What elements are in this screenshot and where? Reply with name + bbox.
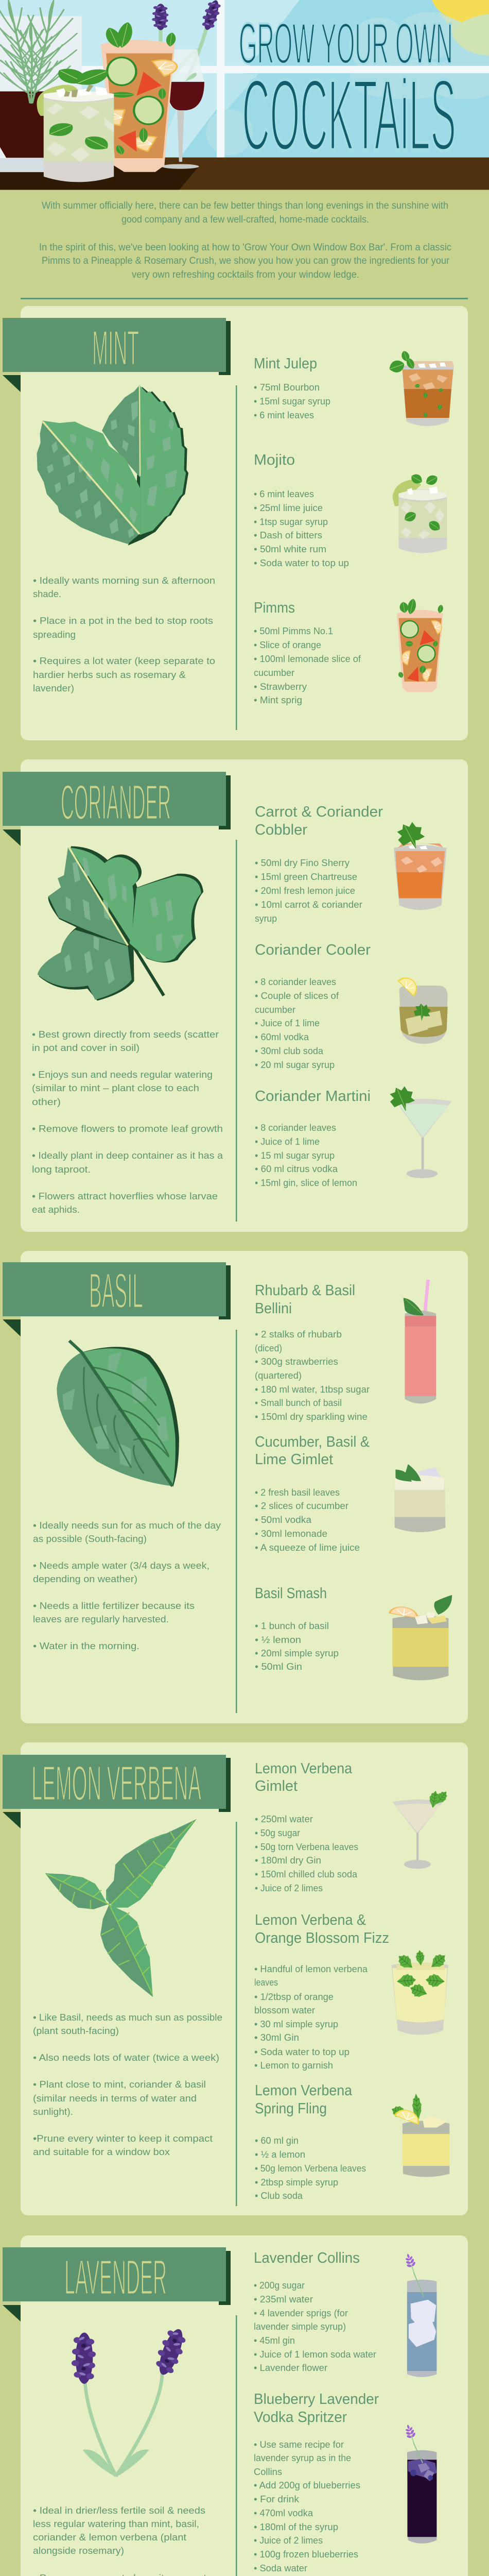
mojito glass bbox=[37, 65, 114, 182]
recipe: Mint Julep: • 6 mint leaves bbox=[254, 410, 314, 420]
recipe: Carrot & Coriander Cobbler: Carrot & Coriander bbox=[255, 804, 383, 820]
pimms glass bbox=[99, 22, 183, 172]
illustration: lavender sprigs bbox=[72, 2325, 190, 2477]
recipe: Lemon Verbena Gimlet: • 50g sugar bbox=[255, 1827, 300, 1838]
growing tips: coriander: eat aphids. bbox=[32, 1204, 80, 1215]
window ledge table bbox=[0, 158, 489, 190]
recipe: Lemon Verbena Spring Fling: Lemon Verbena bbox=[255, 2082, 352, 2099]
recipe: Lemon Verbena & Orange Blossom Fizz: • Soda water to top up bbox=[254, 2046, 350, 2057]
recipe: Lemon Verbena Spring Fling bbox=[255, 2082, 366, 2201]
recipe: Blueberry Lavender Vodka Spritzer bbox=[254, 2391, 379, 2576]
recipe: Basil Smash: Basil Smash bbox=[255, 1585, 327, 1602]
recipe: Pimms: Pimms bbox=[254, 600, 295, 616]
recipe: Lemon Verbena & Orange Blossom Fizz: • 1/2tbsp of orange bbox=[254, 1991, 334, 2002]
recipe: Coriander Martini: • 60 ml citrus vodka bbox=[255, 1163, 338, 1174]
growing tips: mint bbox=[33, 575, 215, 693]
recipe: Mojito bbox=[254, 452, 349, 568]
recipe: Coriander Martini: • 15ml gin, slice of lemon bbox=[255, 1177, 357, 1188]
recipe: Blueberry Lavender Vodka Spritzer: • 100g frozen blueberries bbox=[254, 2549, 358, 2560]
icon: coriander martini glass bbox=[388, 1085, 451, 1178]
recipe: Pimms: • Mint sprig bbox=[254, 694, 302, 705]
recipe: Lemon Verbena Gimlet: Gimlet bbox=[255, 1778, 298, 1794]
heading banner: basil: BASIL bbox=[89, 1263, 143, 1318]
illustration: mint leaves bbox=[37, 385, 188, 546]
header scene: window and cocktails bbox=[0, 0, 489, 190]
heading banner: mint bbox=[3, 318, 231, 392]
recipe: Lemon Verbena Spring Fling: • 60 ml gin bbox=[255, 2135, 299, 2146]
recipe: Cucumber, Basil & Lime Gimlet: Lime Gimlet bbox=[255, 1451, 333, 1468]
heading banner: coriander bbox=[3, 772, 231, 846]
panel: basil bbox=[3, 1251, 468, 1723]
panel: lemon verbena: LEMON VERBENA bbox=[31, 1756, 201, 1811]
recipe: Cucumber, Basil & Lime Gimlet: • 30ml lemonade bbox=[255, 1528, 327, 1539]
recipe: Basil Smash: • 20ml simple syrup bbox=[255, 1648, 339, 1658]
recipe: Lemon Verbena Gimlet bbox=[255, 1760, 358, 1893]
growing tips: lavender bbox=[33, 2505, 206, 2576]
recipe: Rhubarb & Basil Bellini: Bellini bbox=[255, 1300, 292, 1317]
recipe: Rhubarb & Basil Bellini bbox=[255, 1282, 370, 1422]
recipe: Mojito: • 6 mint leaves bbox=[254, 488, 314, 499]
recipe: Coriander Martini: • Juice of 1 lime bbox=[255, 1136, 320, 1147]
recipe: Blueberry Lavender Vodka Spritzer: • 470ml vodka bbox=[254, 2507, 313, 2518]
recipe: Blueberry Lavender Vodka Spritzer: Vodka Spritzer bbox=[254, 2409, 347, 2426]
recipe: Lemon Verbena Gimlet: • Juice of 2 limes bbox=[255, 1883, 323, 1893]
growing tips: coriander: • Ideally plant in deep container as it has a bbox=[32, 1150, 223, 1161]
recipe: Basil Smash: • 50ml Gin bbox=[255, 1661, 302, 1672]
recipe: Rhubarb & Basil Bellini: • 2 stalks of rhubarb bbox=[255, 1329, 342, 1340]
panel: lavender bbox=[3, 2235, 468, 2576]
growing tips: mint: • Ideally wants morning sun & afternoon bbox=[33, 575, 215, 586]
recipe: Cucumber, Basil & Lime Gimlet bbox=[255, 1434, 370, 1553]
recipe: Lemon Verbena & Orange Blossom Fizz: Lemon Verbena & bbox=[255, 1912, 366, 1928]
growing tips: mint: hardier herbs such as rosemary & bbox=[33, 669, 186, 680]
heading banner: basil bbox=[3, 1262, 231, 1336]
recipe: Carrot & Coriander Cobbler: syrup bbox=[255, 913, 277, 924]
icon: lavender collins glass bbox=[403, 2252, 436, 2377]
growing tips: coriander: in pot and cover in soil) bbox=[32, 1042, 139, 1053]
recipe: Carrot & Coriander Cobbler: • 50ml dry Fino Sherry bbox=[255, 857, 350, 868]
growing tips: lavender: • Ideal in drier/less fertile soil & needs bbox=[33, 2505, 205, 2516]
recipe: Lemon Verbena Gimlet: • 250ml water bbox=[255, 1814, 313, 1824]
icon: basil gimlet glass bbox=[395, 1464, 445, 1532]
recipe: Cucumber, Basil & Lime Gimlet: • 50ml vodka bbox=[255, 1514, 312, 1525]
growing tips: lemon verbena: sunlight). bbox=[33, 2106, 73, 2117]
icon: carrot cobbler glass bbox=[394, 820, 447, 910]
icon: spring fling glass bbox=[390, 2093, 449, 2177]
recipe: Carrot & Coriander Cobbler: • 10ml carrot & coriander bbox=[255, 899, 362, 910]
recipe: Pimms: • Slice of orange bbox=[254, 639, 321, 650]
glass of red drink with rosemary bbox=[0, 0, 86, 172]
recipe: Pimms: • Strawberry bbox=[254, 681, 307, 692]
recipe: Lemon Verbena & Orange Blossom Fizz: • Lemon to garnish bbox=[254, 2060, 333, 2071]
recipe: Lemon Verbena & Orange Blossom Fizz: • 30ml Gin bbox=[254, 2032, 299, 2043]
icon: pimms glass bbox=[397, 598, 445, 692]
heading banner: lavender bbox=[3, 2247, 231, 2321]
growing tips: lemon verbena: • Like Basil, needs as much sun as possible bbox=[33, 2012, 222, 2023]
recipe: Mojito: • 25ml lime juice bbox=[254, 502, 323, 513]
growing tips: lavender: less regular watering than mint, basil, bbox=[33, 2518, 199, 2529]
recipe: Rhubarb & Basil Bellini: Rhubarb & Basil bbox=[255, 1282, 355, 1299]
recipe: Lavender Collins: • 200g sugar bbox=[254, 2280, 305, 2291]
growing tips: lemon verbena: and suitable for a window box bbox=[33, 2146, 170, 2157]
introduction text: good company and a few well-crafted, home-made cocktails. bbox=[121, 214, 369, 225]
recipe: Blueberry Lavender Vodka Spritzer: • Use same recipe for bbox=[254, 2439, 344, 2450]
heading banner: lavender: LAVENDER bbox=[64, 2250, 167, 2305]
growing tips: mint: • Requires a lot water (keep separate to bbox=[33, 655, 215, 666]
introduction text: With summer officially here, there can be few better things than long evenings in the sunshine with bbox=[42, 200, 448, 211]
introduction text: In the spirit of this, we've been looking at how to 'Grow Your Own Window Box Bar'. From a classic bbox=[39, 242, 451, 253]
growing tips: basil: • Water in the morning. bbox=[33, 1640, 139, 1651]
recipe: Lemon Verbena Spring Fling: Spring Fling bbox=[255, 2100, 327, 2117]
recipe: Blueberry Lavender Vodka Spritzer: • 180ml of the syrup bbox=[254, 2521, 338, 2532]
growing tips: coriander: • Enjoys sun and needs regular watering bbox=[32, 1069, 213, 1080]
recipe: Carrot & Coriander Cobbler bbox=[255, 804, 383, 924]
recipe: Blueberry Lavender Vodka Spritzer: • Soda water bbox=[254, 2563, 307, 2573]
recipe: Pimms bbox=[254, 600, 361, 705]
growing tips: lemon verbena: • Plant close to mint, coriander & basil bbox=[33, 2079, 206, 2090]
growing tips: coriander: other) bbox=[32, 1096, 61, 1107]
icon: coriander cooler glass bbox=[397, 973, 448, 1044]
panel: coriander bbox=[3, 759, 468, 1232]
recipe: Rhubarb & Basil Bellini: (diced) bbox=[255, 1343, 282, 1353]
recipe: Lemon Verbena Gimlet: • 50g torn Verbena leaves bbox=[255, 1841, 358, 1852]
growing tips: basil bbox=[33, 1520, 221, 1651]
recipe: Lemon Verbena Gimlet: Lemon Verbena bbox=[255, 1760, 352, 1777]
recipe: Lemon Verbena & Orange Blossom Fizz: • 30 ml simple syrup bbox=[254, 2019, 338, 2029]
window sky with sun and clouds bbox=[0, 0, 489, 158]
recipe: Blueberry Lavender Vodka Spritzer: Blueberry Lavender bbox=[254, 2391, 379, 2408]
recipe: Mint Julep: • 15ml sugar syrup bbox=[254, 396, 330, 406]
recipe: Lemon Verbena Gimlet: • 150ml chilled club soda bbox=[255, 1869, 358, 1879]
recipe: Lavender Collins: • 235ml water bbox=[254, 2294, 313, 2304]
recipe: Blueberry Lavender Vodka Spritzer: lavender syrup as in the bbox=[254, 2452, 351, 2463]
illustration: basil leaf bbox=[57, 1341, 179, 1487]
recipe: Lavender Collins: lavender simple syrup) bbox=[254, 2321, 346, 2332]
recipe: Lemon Verbena Spring Fling: • 50g lemon Verbena leaves bbox=[255, 2163, 366, 2174]
recipe: Coriander Cooler: • 30ml club soda bbox=[255, 1045, 324, 1056]
recipe: Lavender Collins: • Lavender flower bbox=[254, 2362, 327, 2373]
heading banner: coriander: CORIANDER bbox=[61, 775, 171, 830]
growing tips: basil: • Needs a little fertilizer because its bbox=[33, 1600, 195, 1611]
recipe: Pimms: • 50ml Pimms No.1 bbox=[254, 625, 333, 636]
recipe: Rhubarb & Basil Bellini: • Small bunch of basil bbox=[255, 1397, 342, 1408]
recipe: Coriander Cooler: • Couple of slices of bbox=[255, 990, 339, 1001]
recipe: Rhubarb & Basil Bellini: (quartered) bbox=[255, 1370, 302, 1381]
recipe: Lavender Collins: • 4 lavender sprigs (for bbox=[254, 2308, 348, 2318]
recipe: Lemon Verbena & Orange Blossom Fizz: leaves bbox=[254, 1977, 278, 1988]
recipe: Coriander Martini: • 15 ml sugar syrup bbox=[255, 1150, 335, 1161]
growing tips: basil: • Needs ample water (3/4 days a week, bbox=[33, 1560, 209, 1571]
heading banner: lemon verbena bbox=[3, 1755, 231, 1828]
icon: mojito glass bbox=[392, 472, 447, 553]
introduction text: Pimms to a Pineapple & Rosemary Crush, we show you how you can grow the ingredients for your bbox=[42, 256, 450, 266]
growing tips: mint: spreading bbox=[33, 629, 76, 640]
recipe: Lemon Verbena & Orange Blossom Fizz bbox=[254, 1912, 389, 2071]
recipe: Lavender Collins bbox=[254, 2250, 376, 2373]
recipe: Mint Julep: Mint Julep bbox=[254, 355, 317, 372]
recipe: Lemon Verbena Spring Fling: • 2tbsp simple syrup bbox=[255, 2177, 338, 2188]
growing tips: coriander bbox=[32, 1029, 223, 1215]
introduction text: very own refreshing cocktails from your window ledge. bbox=[132, 269, 359, 280]
recipe: Carrot & Coriander Cobbler: Cobbler bbox=[255, 822, 308, 838]
recipe: Rhubarb & Basil Bellini: • 300g strawberries bbox=[255, 1356, 338, 1367]
panel: mint bbox=[3, 306, 468, 740]
recipe: Coriander Martini bbox=[255, 1088, 371, 1188]
icon: bellini glass bbox=[404, 1280, 436, 1403]
recipe: Blueberry Lavender Vodka Spritzer: • For drink bbox=[254, 2494, 300, 2504]
recipe: Coriander Cooler bbox=[255, 942, 371, 1070]
growing tips: coriander: • Flowers attract hoverflies whose larvae bbox=[32, 1191, 218, 1201]
growing tips: coriander: (similar to mint – plant close to each bbox=[32, 1082, 199, 1093]
illustration: coriander leaf bbox=[38, 846, 203, 1001]
recipe: Mojito: Mojito bbox=[254, 452, 295, 468]
recipe: Lemon Verbena & Orange Blossom Fizz: • Handful of lemon verbena bbox=[254, 1963, 368, 1974]
growing tips: mint: shade. bbox=[33, 588, 61, 599]
recipe: Rhubarb & Basil Bellini: • 150ml dry sparkling wine bbox=[255, 1411, 368, 1422]
recipe: Lavender Collins: • Juice of 1 lemon soda water bbox=[254, 2349, 376, 2360]
recipe: Coriander Cooler: • 60ml vodka bbox=[255, 1031, 309, 1042]
growing tips: basil: • Ideally needs sun for as much of the day bbox=[33, 1520, 221, 1531]
title bbox=[239, 12, 456, 172]
title: COCKTAiLS bbox=[242, 58, 456, 172]
icon: orange blossom fizz glass bbox=[392, 1950, 449, 2035]
recipe: Basil Smash: • 1 bunch of basil bbox=[255, 1620, 329, 1631]
growing tips: mint: • Place in a pot in the bed to stop roots bbox=[33, 615, 213, 626]
recipe: Basil Smash bbox=[255, 1585, 339, 1672]
recipe: Mojito: • 1tsp sugar syrup bbox=[254, 516, 328, 527]
heading banner: mint: MINT bbox=[92, 320, 139, 376]
recipe: Lemon Verbena & Orange Blossom Fizz: Orange Blossom Fizz bbox=[255, 1930, 389, 1946]
recipe: Lavender Collins: Lavender Collins bbox=[254, 2250, 360, 2266]
growing tips: basil: as possible (South-facing) bbox=[33, 1533, 147, 1544]
icon: basil smash glass bbox=[389, 1595, 452, 1680]
recipe: Cucumber, Basil & Lime Gimlet: • A squeeze of lime juice bbox=[255, 1542, 360, 1553]
growing tips: coriander: • Best grown directly from seeds (scatter bbox=[32, 1029, 219, 1040]
recipe: Pimms: cucumber bbox=[254, 667, 294, 678]
growing tips: lavender: alongside rosemary) bbox=[33, 2545, 124, 2556]
recipe: Blueberry Lavender Vodka Spritzer: Collins bbox=[254, 2466, 282, 2477]
growing tips: lemon verbena: • Also needs lots of water (twice a week) bbox=[33, 2052, 219, 2063]
recipe: Cucumber, Basil & Lime Gimlet: • 2 slices of cucumber bbox=[255, 1500, 348, 1511]
recipe: Cucumber, Basil & Lime Gimlet: • 2 fresh basil leaves bbox=[255, 1487, 340, 1498]
illustration: lemon verbena leaves bbox=[45, 1819, 197, 1997]
panel: lemon verbena bbox=[3, 1742, 468, 2215]
recipe: Lavender Collins: • 45ml gin bbox=[254, 2335, 295, 2346]
wine glass with lavender bbox=[152, 0, 223, 169]
recipe: Rhubarb & Basil Bellini: • 180 ml water, 1tbsp sugar bbox=[255, 1384, 370, 1395]
growing tips: lemon verbena: •Prune every winter to keep it compact bbox=[33, 2133, 213, 2144]
recipe: Mojito: • Soda water to top up bbox=[254, 557, 349, 568]
growing tips: lavender: coriander & lemon verbena (plant bbox=[33, 2532, 186, 2543]
recipe: Cucumber, Basil & Lime Gimlet: Cucumber, Basil & bbox=[255, 1434, 370, 1450]
recipe: Coriander Cooler: • Juice of 1 lime bbox=[255, 1018, 320, 1028]
icon: blueberry spritzer glass bbox=[403, 2423, 436, 2544]
recipe: Carrot & Coriander Cobbler: • 15ml green Chartreuse bbox=[255, 871, 357, 882]
recipe: Basil Smash: • ½ lemon bbox=[255, 1634, 301, 1645]
growing tips: lemon verbena: (similar needs in terms of water and bbox=[33, 2093, 197, 2104]
recipe: Blueberry Lavender Vodka Spritzer: • Add 200g of blueberries bbox=[254, 2480, 360, 2490]
title: GROW YOUR OWN bbox=[239, 12, 453, 76]
recipe: Coriander Martini: • 8 coriander leaves bbox=[255, 1122, 336, 1133]
growing tips: basil: leaves are regularly harvested. bbox=[33, 1614, 169, 1624]
recipe: Mint Julep bbox=[254, 355, 330, 420]
recipe: Coriander Martini: Coriander Martini bbox=[255, 1088, 371, 1105]
recipe: Lemon Verbena & Orange Blossom Fizz: blossom water bbox=[254, 2005, 315, 2015]
recipe: Lemon Verbena Gimlet: • 180ml dry Gin bbox=[255, 1855, 321, 1866]
recipe: Mojito: • Dash of bitters bbox=[254, 530, 322, 540]
recipe: Lemon Verbena Spring Fling: • ½ a lemon bbox=[255, 2149, 305, 2160]
growing tips: basil: depending on weather) bbox=[33, 1573, 137, 1584]
introduction text bbox=[39, 200, 451, 280]
recipe: Carrot & Coriander Cobbler: • 20ml fresh lemon juice bbox=[255, 885, 355, 896]
recipe: Mojito: • 50ml white rum bbox=[254, 544, 326, 554]
growing tips: mint: lavender) bbox=[33, 683, 74, 693]
recipe: Coriander Cooler: • 8 coriander leaves bbox=[255, 976, 336, 987]
recipe: Coriander Cooler: • 20 ml sugar syrup bbox=[255, 1059, 335, 1070]
recipe: Lemon Verbena Spring Fling: • Club soda bbox=[255, 2190, 303, 2201]
recipe: Coriander Cooler: Coriander Cooler bbox=[255, 942, 371, 958]
growing tips: lemon verbena: (plant south-facing) bbox=[33, 2025, 119, 2036]
icon: mint julep glass bbox=[388, 350, 454, 426]
growing tips: lemon verbena bbox=[33, 2012, 222, 2157]
recipe: Pimms: • 100ml lemonade slice of bbox=[254, 653, 361, 664]
recipe: Mint Julep: • 75ml Bourbon bbox=[254, 382, 320, 393]
recipe: Blueberry Lavender Vodka Spritzer: • Juice of 2 limes bbox=[254, 2535, 323, 2546]
growing tips: coriander: long taproot. bbox=[32, 1164, 91, 1175]
icon: verbena gimlet martini bbox=[392, 1788, 450, 1869]
recipe: Coriander Cooler: cucumber bbox=[255, 1004, 295, 1015]
growing tips: coriander: • Remove flowers to promote leaf growth bbox=[32, 1123, 223, 1134]
